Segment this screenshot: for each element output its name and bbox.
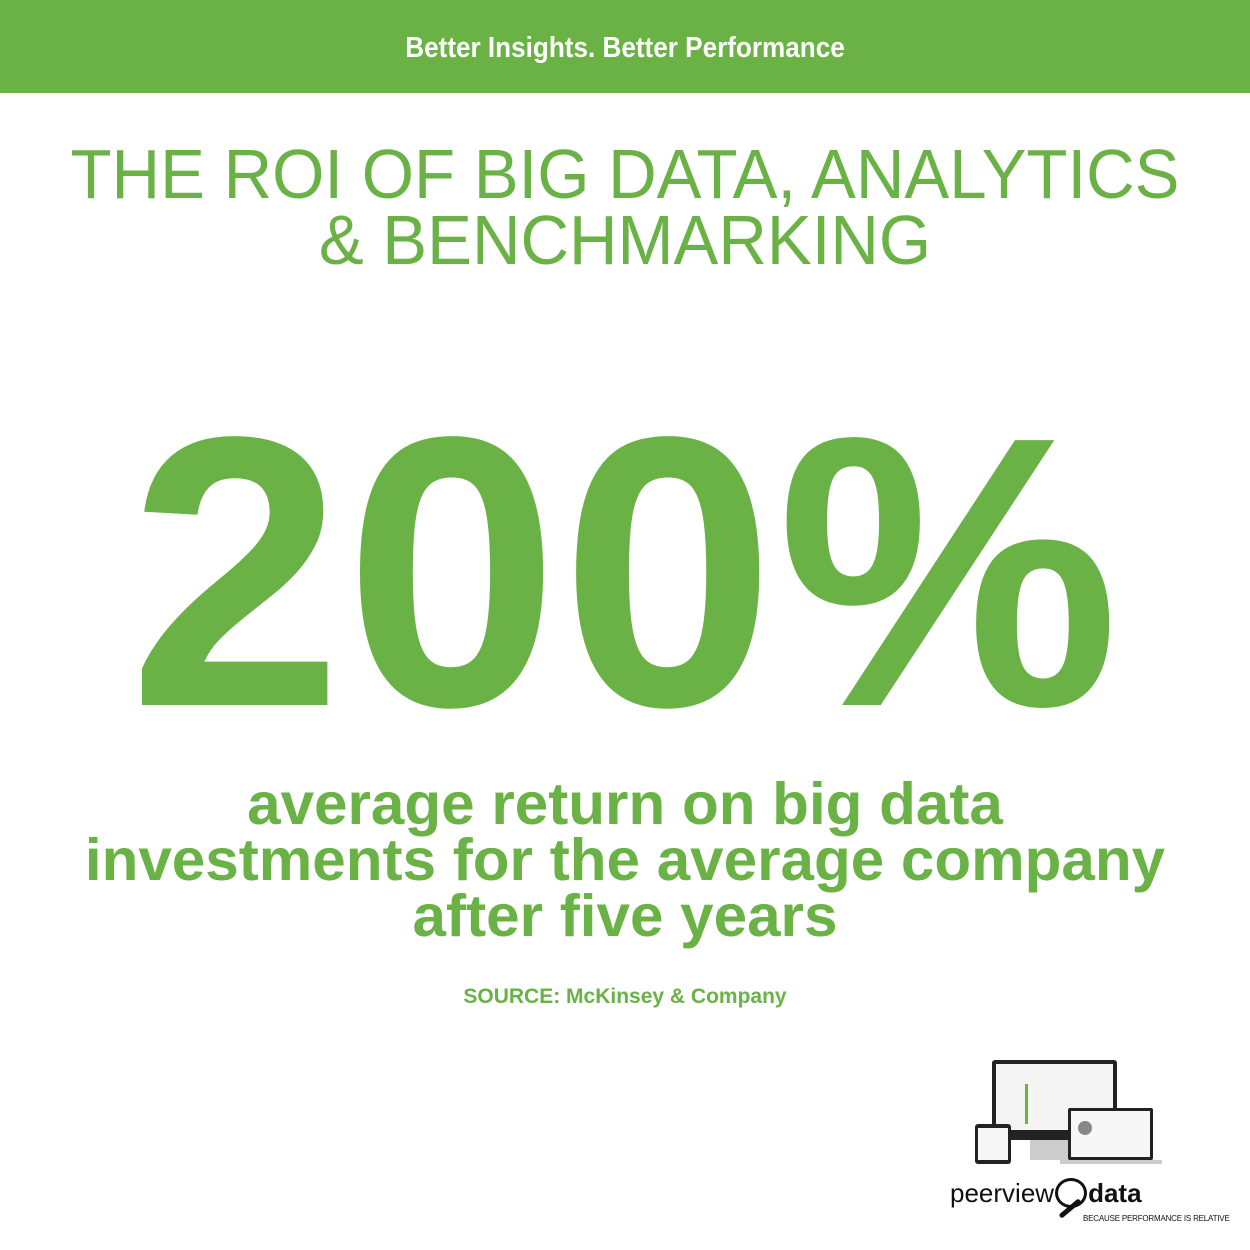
banner text: Better Insights. Better Performance (405, 32, 845, 64)
description text: average return on big data (247, 771, 1003, 837)
big number 200%: 200% (129, 356, 1121, 787)
title: & BENCHMARKING (319, 201, 931, 279)
description text: after five years (413, 883, 837, 949)
icon: devices (975, 1060, 1162, 1164)
title (71, 135, 1179, 279)
top banner (0, 0, 1250, 93)
description text: investments for the average company (85, 827, 1165, 893)
logo (950, 1060, 1230, 1223)
title: THE ROI OF BIG DATA, ANALYTICS (71, 135, 1179, 213)
icon: magnifier handle (1058, 1198, 1082, 1219)
description text (85, 771, 1165, 949)
logo text: peerview data (950, 1178, 1142, 1208)
source: SOURCE: McKinsey & Company (463, 985, 787, 1008)
tagline: BECAUSE PERFORMANCE IS RELATIVE (1083, 1214, 1230, 1223)
